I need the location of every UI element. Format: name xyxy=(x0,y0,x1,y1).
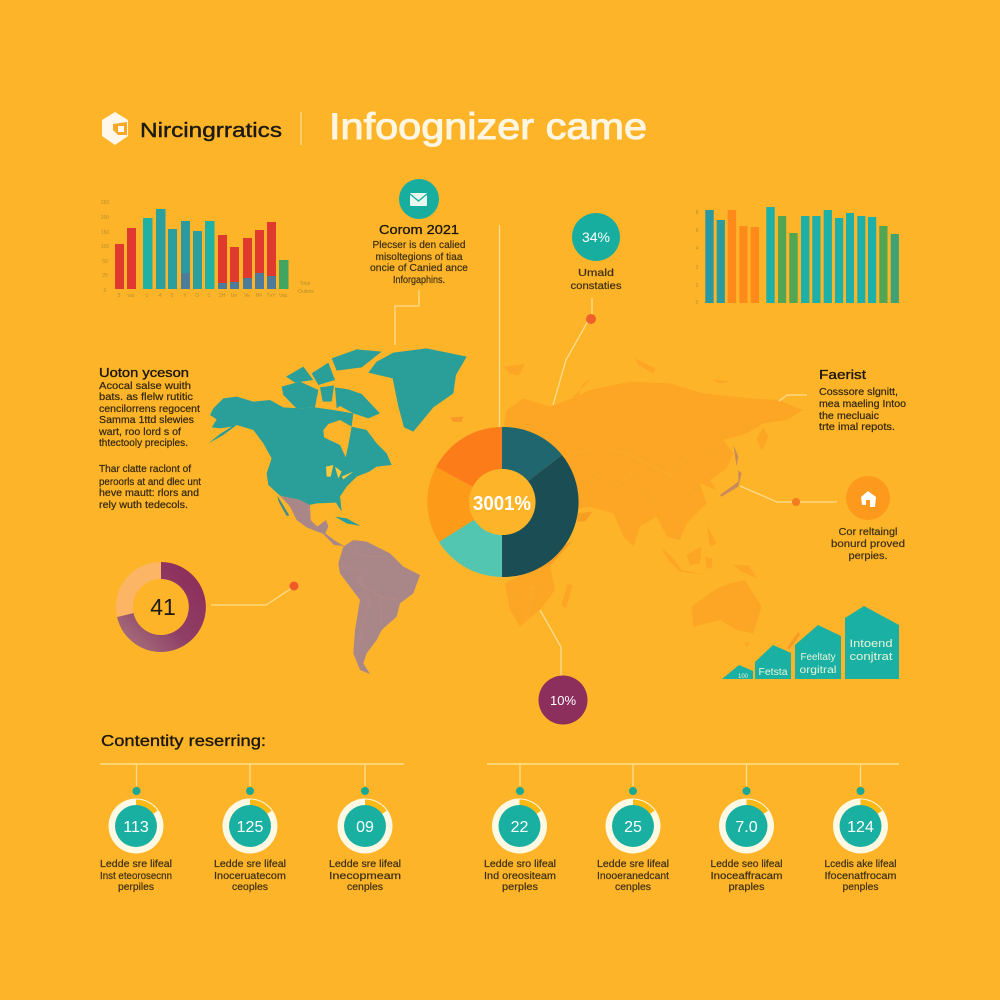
stat: 7.0: 7.0 xyxy=(735,819,758,836)
bar one: 100 xyxy=(738,674,749,680)
donut value: 3001% xyxy=(473,493,531,515)
callout text xyxy=(831,527,905,562)
left paragraph one: wart, roo lord s of xyxy=(98,427,181,438)
stat: 22: Ind oreositeam xyxy=(484,871,556,882)
Arabia coast xyxy=(537,512,593,573)
callout text: Inforgaphins. xyxy=(393,275,445,286)
callout text: misoltegions of tiaa xyxy=(376,252,463,263)
left chart axis labels: 25 xyxy=(102,273,108,279)
dot marker xyxy=(792,498,800,506)
connector: home callout xyxy=(740,486,837,502)
stat: 09: 09 xyxy=(356,819,374,836)
left chart axis labels: Ue xyxy=(231,293,237,299)
Faerist paragraph: Cosssore slgnitt, xyxy=(819,387,898,398)
left chart axis labels: Ve xyxy=(244,293,250,299)
right chart axis labels: 2 xyxy=(696,283,699,289)
text block: left xyxy=(98,365,201,511)
Faerist heading: Faerist xyxy=(819,367,866,382)
Central America xyxy=(280,496,344,546)
icon: envelope xyxy=(399,179,439,219)
right chart axis labels: 6 xyxy=(696,228,699,234)
connector: center column xyxy=(498,225,500,428)
bar three: Feeltaty xyxy=(800,652,836,663)
right chart axis labels: 4 xyxy=(696,246,699,252)
left paragraph two xyxy=(99,464,201,511)
callout heading: Corom 2021 xyxy=(379,222,459,237)
left chart axis labels: Y xyxy=(183,293,187,299)
segment: mint xyxy=(439,520,502,577)
stat: 113: Inst eteorosecnn xyxy=(100,871,172,882)
left chart axis labels: 50 xyxy=(102,259,108,265)
callout: home xyxy=(792,476,905,562)
callout text: perpies. xyxy=(848,551,888,562)
left paragraph two: Thar clatte raclont of xyxy=(99,464,191,475)
Faerist paragraph: the mecluaic xyxy=(819,411,879,422)
stat: 22: perples xyxy=(502,882,538,893)
left chart axis labels: Vau xyxy=(279,293,287,299)
rule: right xyxy=(487,763,899,765)
stat: 22: 22 xyxy=(511,819,528,836)
stat: 125: Ledde sre lifeal xyxy=(214,859,286,870)
world map xyxy=(208,348,803,674)
stat: 7.0: Ledde seo lifeal xyxy=(710,859,782,870)
callout text: Plecser is den calied xyxy=(372,240,466,251)
connector: Faerist xyxy=(779,395,807,401)
callout text: bonurd proved xyxy=(831,539,905,550)
Eurasia xyxy=(503,382,803,547)
Great Lakes xyxy=(326,465,353,479)
stat: 22 xyxy=(484,764,556,893)
left paragraph one: thtectooly preciples. xyxy=(99,438,188,449)
left chart axis labels: 200 xyxy=(101,215,109,221)
icon: house xyxy=(846,476,890,520)
left paragraph two: rely wuth tedecols. xyxy=(99,500,188,511)
left paragraph one: Acocal salse wuith xyxy=(99,381,191,392)
right chart axis labels: 0 xyxy=(696,300,699,306)
stat: 125: ceoples xyxy=(232,882,268,893)
left chart axis labels: TvY xyxy=(267,293,276,299)
badge: 10% xyxy=(538,676,588,724)
right chart bars xyxy=(705,207,899,303)
stat: 113: Ledde sre lifeal xyxy=(100,859,172,870)
chart: house-shaped rising bars xyxy=(722,606,899,680)
country borders xyxy=(510,447,723,620)
donut chart: 41 xyxy=(116,562,298,652)
left chart axis labels xyxy=(101,200,287,299)
stat: 125 xyxy=(214,764,286,893)
Arctic islands and Kamchatka xyxy=(503,358,768,451)
brand name: Nircingrratics xyxy=(140,120,282,142)
bar two xyxy=(755,645,791,679)
connector lines xyxy=(211,225,837,677)
text block: Faerist xyxy=(819,367,906,433)
bar three: orgitral xyxy=(800,665,836,676)
bar two: Fetsta xyxy=(758,667,788,678)
segment: dark teal xyxy=(502,455,579,577)
left chart axis labels: var xyxy=(128,293,135,299)
stat: 125: Inoceruatecom xyxy=(214,871,286,882)
stat: 113 xyxy=(100,764,172,893)
badge caption: constaties xyxy=(570,281,622,292)
bar three xyxy=(795,625,841,679)
callout text xyxy=(370,240,468,286)
stat: 7.0: Inoceaffracam xyxy=(710,871,782,882)
left chart axis labels: 0 xyxy=(104,288,107,294)
stat: 25: Ledde sre lifeal xyxy=(597,859,669,870)
left heading: Uoton yceson xyxy=(99,365,189,380)
map: Europe, Asia, Africa and Oceania xyxy=(503,358,803,648)
stat: 7.0 xyxy=(710,764,782,893)
Australia xyxy=(692,580,762,647)
left paragraph one: bats. as flelw rutitic xyxy=(99,392,193,403)
left chart axis labels: 5 xyxy=(171,293,174,299)
header divider xyxy=(300,112,302,145)
bar four xyxy=(845,606,899,679)
stat: 25: Inooeranedcant xyxy=(597,871,669,882)
bar chart: left xyxy=(101,200,314,299)
donut chart: centre xyxy=(427,427,579,577)
stat: 22: Ledde sro lifeal xyxy=(484,859,556,870)
North America xyxy=(208,348,467,526)
badge caption: Umald xyxy=(578,268,614,279)
left chart axis labels: 1 xyxy=(146,293,149,299)
connector: 34% to map xyxy=(553,298,592,405)
Japan xyxy=(720,445,742,497)
left paragraph one: Samma 1ttd slewies xyxy=(99,415,194,426)
stat: 113: 113 xyxy=(123,819,149,836)
section heading: Contentity reserring: xyxy=(101,733,266,750)
connector: 41 donut xyxy=(211,586,295,605)
Iceland xyxy=(450,417,463,422)
callout: Corom 2021 xyxy=(370,179,468,286)
callout text: oncie of Canied ance xyxy=(370,263,468,274)
Madagascar xyxy=(561,584,573,609)
bar four: Intoend xyxy=(850,638,892,650)
badge caption xyxy=(570,268,622,292)
map: Americas xyxy=(208,348,467,674)
left chart axis labels: 1 xyxy=(208,293,211,299)
bar four: conjtrat xyxy=(850,651,892,663)
left paragraph two: peroorls at and dlec unt xyxy=(99,477,201,488)
right chart axis labels xyxy=(696,210,699,306)
Faerist paragraph: mea maeling Intoo xyxy=(819,399,906,410)
title: Infoognizer came xyxy=(329,106,647,147)
South America xyxy=(338,540,420,674)
left chart axis labels: 250 xyxy=(101,200,109,206)
stat: 124: Lcedis ake lifeal xyxy=(824,859,896,870)
left paragraph two: heve mautt: rlors and xyxy=(99,488,199,499)
stat: 09: cenples xyxy=(347,882,383,893)
callout: 34% xyxy=(570,213,622,324)
left chart legend: Total xyxy=(300,281,310,287)
dot marker xyxy=(290,582,298,590)
Africa xyxy=(505,565,555,627)
stat: 25 xyxy=(597,764,669,893)
header xyxy=(102,106,647,147)
segment: maroon xyxy=(117,562,206,652)
left chart legend: Outlets xyxy=(298,289,314,295)
bar chart: right xyxy=(696,207,899,306)
left chart axis labels: 100 xyxy=(101,244,109,250)
left chart axis labels: 150 xyxy=(101,230,109,236)
callout text: Cor reltaingl xyxy=(838,527,898,538)
stat: 125: 125 xyxy=(237,819,263,836)
left chart axis labels: 4 xyxy=(159,293,162,299)
stat: 25: cenples xyxy=(615,882,651,893)
New Zealand xyxy=(787,632,800,648)
segment: red-orange xyxy=(436,427,502,487)
stat: 25: 25 xyxy=(624,819,642,836)
badge: 10%: 10% xyxy=(550,693,576,708)
stat row xyxy=(100,764,896,893)
connector: Corom to map xyxy=(395,290,419,345)
left chart axis labels: HF xyxy=(256,293,262,299)
badge: 34%: 34% xyxy=(582,229,610,245)
stat: 09 xyxy=(329,764,401,893)
right chart axis labels: 8 xyxy=(696,210,699,216)
left paragraph one: cencilorrens regocent xyxy=(99,404,200,415)
left chart axis labels: 3H xyxy=(219,293,226,299)
Baja xyxy=(277,496,289,516)
stat: 124: 124 xyxy=(847,819,874,836)
Faerist paragraph: trte imal repots. xyxy=(819,422,895,433)
segment: mid teal xyxy=(502,427,562,481)
connector: 10% xyxy=(540,610,561,677)
rule: left xyxy=(100,763,404,765)
donut hole xyxy=(469,469,535,535)
stat: 124: penples xyxy=(842,882,878,893)
logo icon xyxy=(102,112,128,145)
Faerist paragraph xyxy=(819,387,906,433)
stat: 124: Ifocenatfrocam xyxy=(824,871,896,882)
left chart bars xyxy=(115,209,288,289)
segment: light orange xyxy=(116,562,161,617)
stat: 124 xyxy=(824,764,896,893)
stat: 09: Inecopmeam xyxy=(329,871,401,882)
left chart axis labels: 3 xyxy=(118,293,121,299)
right chart axis labels: 3 xyxy=(696,265,699,271)
left chart axis labels: O xyxy=(195,293,199,299)
Southeast Asia islands xyxy=(661,525,757,578)
segment: orange xyxy=(427,467,474,542)
stat: 7.0: praples xyxy=(728,882,764,893)
timeline rules xyxy=(100,763,899,765)
stat: 09: Ledde sre lifeal xyxy=(329,859,401,870)
left paragraph one xyxy=(98,381,200,449)
dot marker xyxy=(586,314,596,324)
bar one xyxy=(722,665,753,680)
South America borders xyxy=(340,540,397,650)
donut value: 41 xyxy=(150,594,176,620)
left chart legend xyxy=(298,281,314,295)
stat: 113: perpiles xyxy=(118,882,154,893)
